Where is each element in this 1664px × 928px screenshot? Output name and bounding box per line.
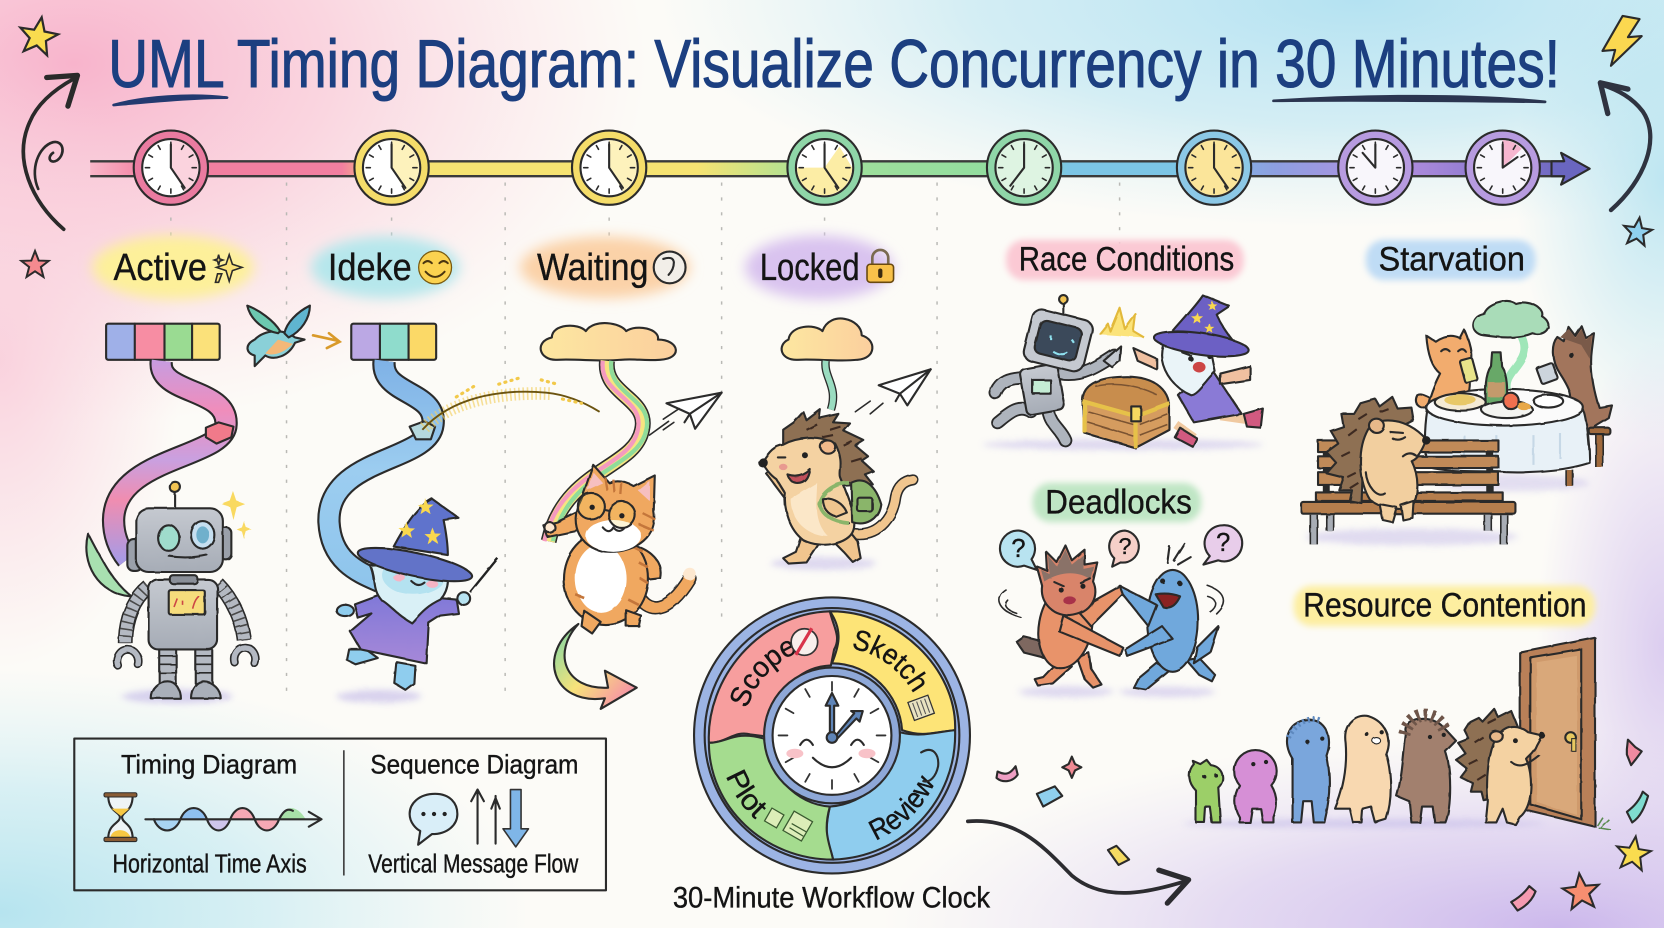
clock 2 bbox=[354, 131, 429, 205]
text: horizontal time axis: Horizontal Time Axis bbox=[112, 850, 307, 878]
icon: plot charts bbox=[765, 808, 813, 841]
arrow: left swirl bbox=[23, 75, 77, 229]
confetti bbox=[996, 740, 1653, 911]
question bubbles: ? bbox=[1216, 529, 1230, 557]
icon: smiley bbox=[419, 251, 452, 284]
decorative dashed guides bbox=[171, 183, 1120, 698]
state label: Ideke: Ideke bbox=[328, 246, 412, 289]
illustration: deadlock characters bbox=[999, 543, 1223, 697]
ribbon: idle bbox=[329, 361, 435, 582]
icon: sparkles bbox=[214, 255, 242, 282]
segment: plot bbox=[709, 736, 833, 860]
question bubbles bbox=[1000, 525, 1242, 570]
panel: starvation bbox=[1301, 240, 1612, 545]
icon: backpack bbox=[819, 480, 881, 523]
segment label: sketch: Sketch bbox=[853, 630, 926, 692]
icon: message arrows bbox=[471, 790, 528, 847]
hub ring bbox=[764, 668, 900, 803]
state label: Locked: Locked bbox=[760, 246, 860, 289]
question bubbles: ? bbox=[1119, 533, 1132, 559]
icon: round clock bbox=[654, 252, 686, 283]
heading: resource contention: Resource Contention bbox=[1303, 587, 1587, 625]
icon: lightning bbox=[1602, 16, 1642, 66]
door bbox=[1520, 638, 1611, 830]
icon: sketch pad bbox=[908, 695, 934, 720]
ribbon: green tail bbox=[86, 534, 132, 596]
figure: green bbox=[1189, 760, 1223, 822]
state label: Ideke bbox=[311, 237, 460, 298]
icon: treasure chest bbox=[1082, 377, 1169, 448]
figure: hedgehog at door bbox=[1456, 709, 1545, 825]
question bubbles: ? bbox=[1011, 535, 1026, 563]
character: spiky bbox=[1017, 545, 1125, 688]
segment label: scope: Scope bbox=[730, 640, 795, 706]
icon: speech bubble bbox=[410, 794, 457, 845]
panel: deadlocks bbox=[999, 483, 1242, 697]
wizard racer bbox=[1133, 295, 1263, 447]
illustration: race bbox=[983, 295, 1263, 450]
cloud: locked bbox=[782, 319, 872, 410]
character: wizard bbox=[336, 499, 498, 703]
clock 6 bbox=[1177, 131, 1251, 205]
underline: UML bbox=[114, 96, 227, 105]
caption: workflow clock: 30-Minute Workflow Clock bbox=[673, 881, 990, 914]
state label: Waiting bbox=[520, 237, 690, 298]
clock hands bbox=[826, 693, 863, 740]
arrow: rainbow down bbox=[554, 624, 637, 709]
state label: Locked bbox=[745, 236, 894, 299]
text: sequence diagram: Sequence Diagram bbox=[370, 750, 578, 780]
clock 1 bbox=[134, 131, 208, 205]
icon: review curl bbox=[921, 750, 938, 781]
icon: paper plane 2 bbox=[855, 369, 931, 414]
state label: Waiting: Waiting bbox=[537, 246, 648, 289]
segment: sketch bbox=[830, 611, 955, 734]
ribbon knot bbox=[206, 422, 233, 444]
illustration: dinner table bbox=[1415, 301, 1612, 491]
ribbon knot bbox=[410, 421, 435, 439]
decoration: red star bbox=[21, 251, 49, 277]
robot racer bbox=[995, 295, 1121, 440]
arrow: right curve bbox=[1600, 83, 1650, 210]
state blocks 1 bbox=[106, 324, 220, 360]
decoration: blue star bbox=[1622, 216, 1654, 246]
segment label: plot: Plot bbox=[726, 769, 766, 820]
illustration: bench and hedgehog bbox=[1301, 397, 1518, 545]
icon: sparkles bbox=[222, 491, 252, 539]
spines bbox=[783, 410, 873, 486]
character: hedgehog walking bbox=[758, 410, 913, 570]
arrow: bird pointer bbox=[313, 333, 340, 348]
character: cat diner bbox=[1415, 394, 1431, 408]
panel: resource contention bbox=[1183, 586, 1611, 830]
plates bbox=[1435, 394, 1486, 411]
underline: 30 Minutes bbox=[1273, 96, 1545, 102]
heading: deadlocks: Deadlocks bbox=[1045, 484, 1192, 522]
sparkle trail bbox=[422, 378, 600, 430]
segment: scope bbox=[709, 611, 837, 743]
panel: race conditions bbox=[983, 240, 1263, 450]
state label: Active: Active bbox=[114, 246, 207, 289]
figure: blue bbox=[1287, 719, 1329, 822]
illustration: queue bbox=[1183, 638, 1611, 830]
timeline bbox=[90, 131, 1590, 205]
ribbon: rainbow bbox=[544, 361, 647, 541]
smoke bbox=[1507, 333, 1524, 389]
icon: paper plane 1 bbox=[649, 393, 722, 435]
figure: peach bbox=[1335, 716, 1391, 822]
clock 8 bbox=[1466, 131, 1540, 205]
icon: padlock bbox=[867, 250, 894, 282]
panel: comparison box bbox=[74, 739, 606, 890]
character: cat bbox=[543, 465, 696, 634]
workflow clock bbox=[692, 596, 971, 874]
state blocks 2 bbox=[351, 324, 436, 360]
bottle bbox=[1485, 352, 1507, 410]
arrow: workflow to queue bbox=[968, 821, 1189, 903]
heading: starvation: Starvation bbox=[1379, 241, 1525, 279]
text: vertical message flow: Vertical Message Flow bbox=[368, 850, 579, 878]
clock 5 bbox=[987, 131, 1061, 205]
figure: pink bbox=[1234, 750, 1277, 822]
clock 4 bbox=[787, 131, 862, 205]
segment: review bbox=[827, 730, 955, 860]
character: blue bbox=[1120, 543, 1218, 690]
chart: time wave bbox=[145, 808, 322, 830]
icon: compass bbox=[791, 628, 818, 655]
clash burst bbox=[1099, 308, 1144, 337]
heading: race conditions: Race Conditions bbox=[1019, 241, 1234, 279]
arrow head: timeline bbox=[1552, 153, 1590, 185]
figure: brown bbox=[1397, 715, 1456, 822]
icon: hummingbird bbox=[247, 306, 340, 366]
text: timing diagram: Timing Diagram bbox=[121, 750, 297, 780]
clock 3 bbox=[572, 131, 646, 205]
tail bbox=[855, 480, 913, 534]
ribbon: active bbox=[114, 361, 233, 559]
clock 7 bbox=[1338, 131, 1412, 205]
character: brown diner bbox=[1553, 326, 1612, 430]
cloud: waiting bbox=[541, 323, 676, 541]
character: robot bbox=[86, 482, 255, 704]
legs bbox=[783, 531, 861, 564]
state label: Active bbox=[92, 236, 254, 299]
clock face bbox=[773, 676, 891, 795]
decoration: top-left yellow star bbox=[17, 14, 61, 57]
table legs bbox=[1570, 433, 1599, 486]
segment label: review: Review bbox=[868, 775, 934, 840]
body bbox=[762, 438, 854, 545]
raised arm bbox=[766, 467, 794, 499]
icon: hourglass bbox=[104, 793, 137, 842]
